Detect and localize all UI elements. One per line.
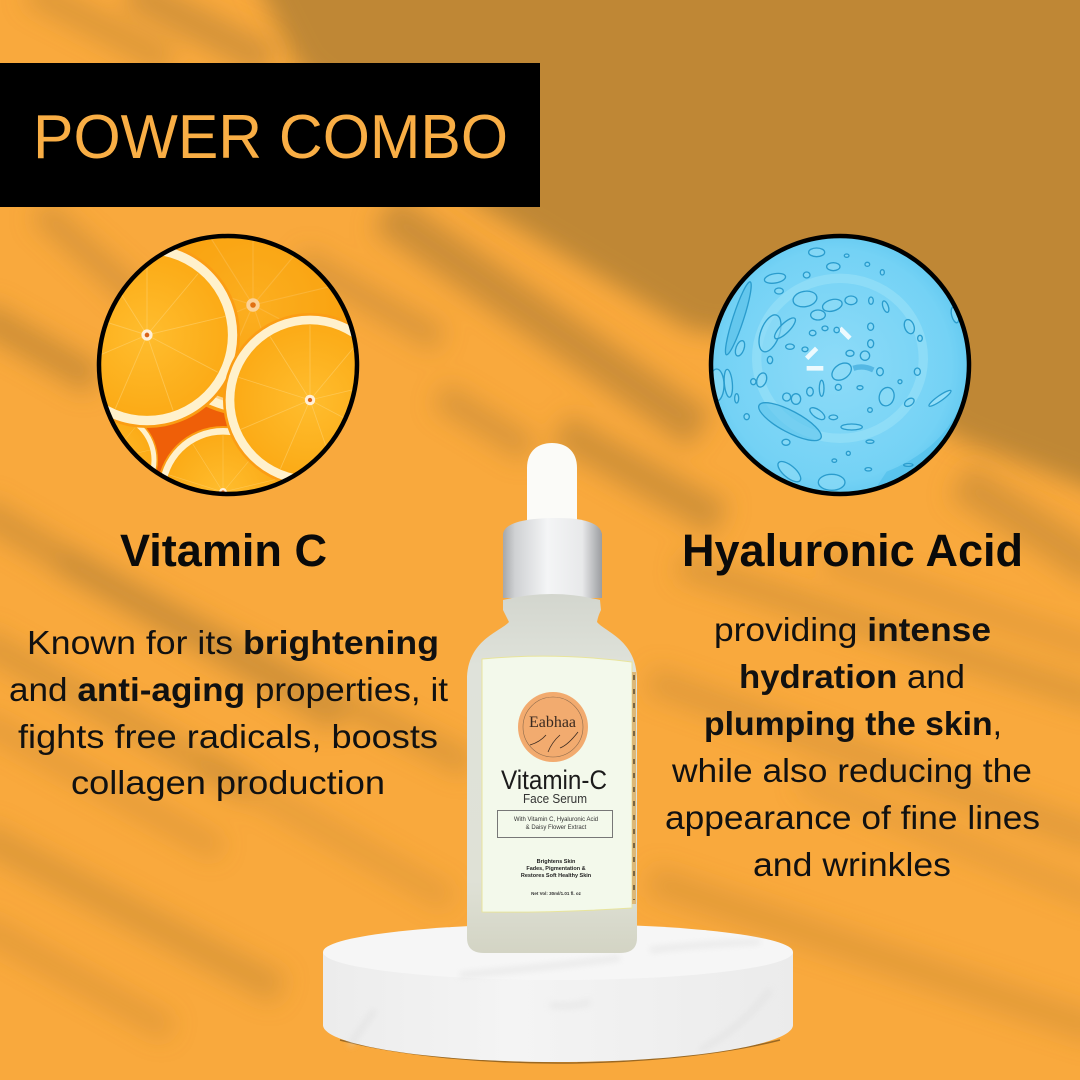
text block: Hyaluronic Acid description: hydration and (739, 658, 965, 695)
dropper bulb (527, 443, 577, 522)
product label: With Vitamin C, Hyaluronic Acid (514, 817, 598, 823)
product label: Restores Soft Healthy Skin (521, 873, 592, 879)
icon: orange slices circle (96, 234, 360, 496)
serum bottle (467, 443, 637, 953)
logo badge (518, 692, 588, 762)
glass body (467, 594, 637, 953)
marble podium (323, 924, 793, 1063)
title banner: POWER COMBO (33, 103, 508, 172)
heading: Vitamin C: Vitamin C (120, 525, 327, 576)
product label: & Daisy Flower Extract (526, 825, 587, 831)
text block: Vitamin C description (9, 624, 448, 801)
heading: Hyaluronic Acid: Hyaluronic Acid (682, 525, 1023, 576)
product label: Net Vol: 30ml/1.01 fl. oz (531, 891, 582, 896)
text block: Hyaluronic Acid description: and wrinkles (753, 846, 951, 883)
text block: Hyaluronic Acid description: while also reducing the (671, 752, 1032, 789)
logo badge: Eabhaa (529, 714, 576, 731)
text block: Vitamin C description: and anti-aging properties, it (9, 671, 448, 708)
text block: Vitamin C description: collagen production (71, 764, 385, 801)
silver collar (503, 518, 602, 598)
product label: Face Serum (523, 792, 587, 806)
product label: Brightens Skin (537, 859, 576, 865)
product label: Vitamin-C (501, 765, 607, 795)
text block: Hyaluronic Acid description: appearance of fine lines (665, 799, 1040, 836)
text block: Vitamin C description: fights free radicals, boosts (18, 718, 438, 755)
icon: hyaluronic gel circle (708, 232, 974, 498)
text block: Hyaluronic Acid description (665, 611, 1040, 883)
product label (482, 656, 636, 912)
product label: Fades, Pigmentation & (526, 866, 586, 872)
text block: Hyaluronic Acid description: providing intense (714, 611, 991, 648)
text block: Hyaluronic Acid description: plumping the skin, (704, 705, 1002, 742)
title banner (0, 63, 540, 207)
text block: Vitamin C description: Known for its brightening (27, 624, 439, 661)
